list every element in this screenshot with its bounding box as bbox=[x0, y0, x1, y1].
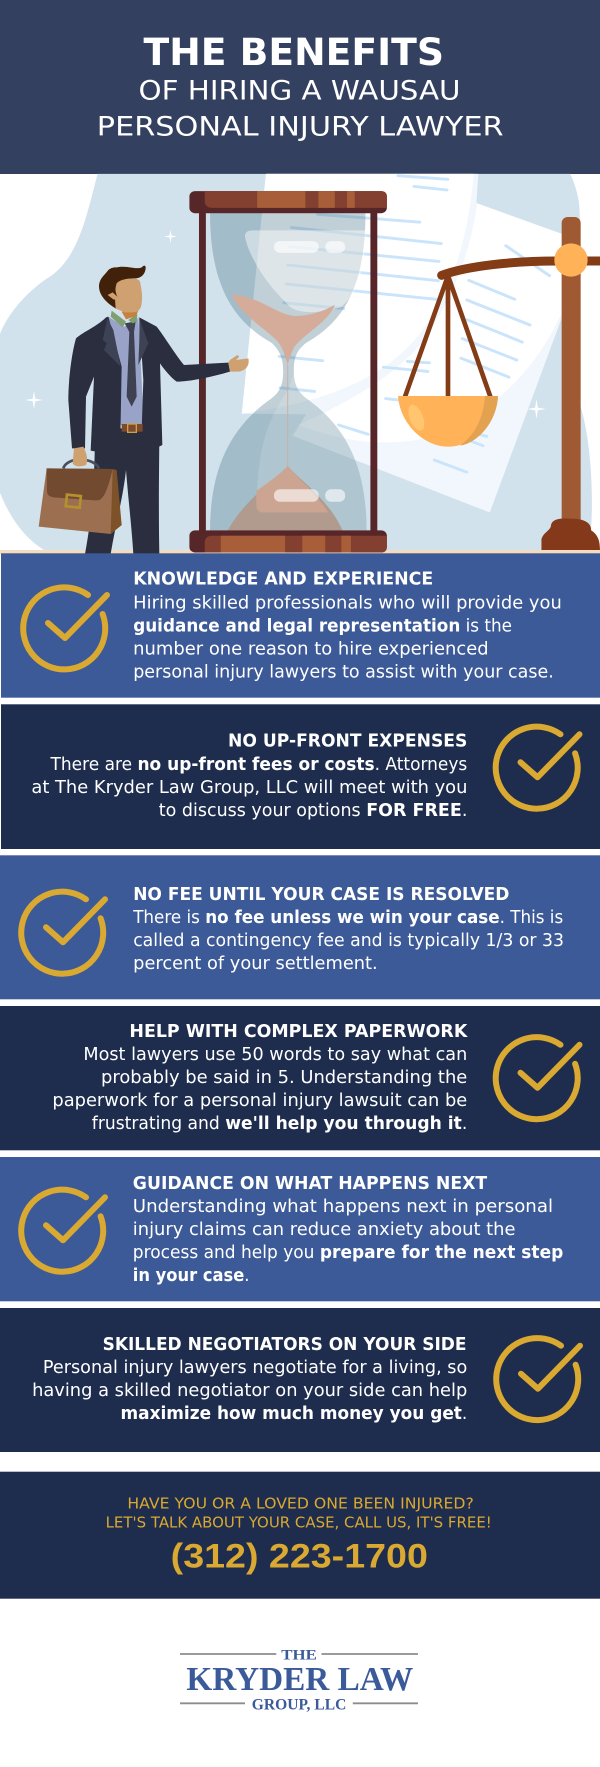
body text bbox=[31, 755, 467, 821]
heading: NO UP-FRONT EXPENSES bbox=[228, 732, 467, 752]
body text: personal injury lawyers to assist with your case. bbox=[133, 662, 554, 682]
icon: hourglass bbox=[189, 191, 387, 552]
scale base bbox=[541, 519, 600, 550]
torso, head and arm bbox=[68, 266, 249, 456]
header banner bbox=[0, 0, 600, 174]
body text: There are no up-front fees or costs. Attorneys bbox=[50, 755, 467, 775]
icon: check mark bbox=[21, 1190, 105, 1272]
subtitle line one: OF HIRING A WAUSAU bbox=[138, 75, 460, 106]
heading: KNOWLEDGE AND EXPERIENCE bbox=[133, 570, 433, 590]
body text bbox=[132, 908, 564, 974]
body text: frustrating and we'll help you through it. bbox=[92, 1114, 467, 1134]
panel: no up-front expenses bbox=[1, 704, 600, 849]
phone number: (312) 223-1700 bbox=[171, 1537, 428, 1575]
logo: The Kryder Law Group bbox=[180, 1648, 418, 1713]
panel: skilled negotiators bbox=[0, 1308, 600, 1452]
title: THE BENEFITS bbox=[144, 31, 444, 74]
panel: guidance on what happens next bbox=[0, 1157, 600, 1301]
body text: number one reason to hire experienced bbox=[133, 639, 489, 659]
body text: injury claims can reduce anxiety about the bbox=[133, 1220, 516, 1240]
body text: in your case. bbox=[133, 1266, 250, 1286]
icon: scales of justice bbox=[398, 217, 600, 527]
heading: HELP WITH COMPLEX PAPERWORK bbox=[129, 1022, 469, 1042]
call to action banner bbox=[0, 1472, 600, 1599]
body text: Hiring skilled professionals who will provide you bbox=[133, 593, 562, 613]
background and papers bbox=[0, 174, 600, 554]
body text: maximize how much money you get. bbox=[120, 1404, 467, 1424]
icon: check mark bbox=[21, 892, 105, 974]
body text: There is no fee unless we win your case. This is bbox=[132, 908, 563, 928]
body text: paperwork for a personal injury lawsuit can be bbox=[52, 1091, 467, 1111]
body text: probably be said in 5. Understanding the bbox=[101, 1068, 467, 1088]
panel: help with complex paperwork bbox=[0, 1006, 600, 1150]
logo: The Kryder Law Group: THE bbox=[281, 1648, 317, 1664]
body text bbox=[52, 1045, 467, 1134]
body text: process and help you prepare for the next step bbox=[133, 1243, 563, 1263]
logo: The Kryder Law Group: GROUP, LLC bbox=[252, 1696, 346, 1713]
subtitle line two: PERSONAL INJURY LAWYER bbox=[97, 112, 504, 143]
heading: SKILLED NEGOTIATORS ON YOUR SIDE bbox=[103, 1335, 466, 1355]
body text: to discuss your options FOR FREE. bbox=[159, 801, 467, 821]
icon: check mark bbox=[23, 587, 107, 669]
body text: Personal injury lawyers negotiate for a living, so bbox=[43, 1358, 467, 1378]
sparkles bbox=[25, 230, 546, 419]
body text: percent of your settlement. bbox=[133, 954, 378, 974]
call to action text bbox=[106, 1494, 492, 1531]
icon: check mark bbox=[496, 727, 580, 809]
body text: guidance and legal representation is the bbox=[133, 616, 512, 636]
panel: no fee until case is resolved bbox=[0, 855, 600, 999]
body text bbox=[32, 1358, 467, 1424]
body text: Understanding what happens next in personal bbox=[133, 1197, 553, 1217]
heading: GUIDANCE ON WHAT HAPPENS NEXT bbox=[133, 1174, 487, 1194]
icon: check mark bbox=[496, 1037, 580, 1119]
call to action text: HAVE YOU OR A LOVED ONE BEEN INJURED? bbox=[127, 1494, 474, 1512]
trousers bbox=[85, 428, 159, 554]
body text: at The Kryder Law Group, LLC will meet with you bbox=[31, 778, 467, 798]
icon: briefcase bbox=[39, 447, 122, 534]
body text: having a skilled negotiator on your side can help bbox=[32, 1381, 467, 1401]
body text: Most lawyers use 50 words to say what can bbox=[83, 1045, 467, 1065]
icon: check mark bbox=[496, 1338, 580, 1420]
logo: The Kryder Law Group: KRYDER LAW bbox=[186, 1661, 413, 1698]
panel: knowledge and experience bbox=[1, 553, 600, 698]
body text bbox=[133, 1197, 563, 1286]
body text: called a contingency fee and is typically 1/3 or 33 bbox=[133, 931, 564, 951]
body text bbox=[133, 593, 562, 682]
hero illustration bbox=[0, 174, 600, 554]
call to action text: LET'S TALK ABOUT YOUR CASE, CALL US, IT'S FREE! bbox=[106, 1513, 492, 1531]
heading: NO FEE UNTIL YOUR CASE IS RESOLVED bbox=[133, 885, 509, 905]
icon: businessman bbox=[39, 266, 249, 554]
